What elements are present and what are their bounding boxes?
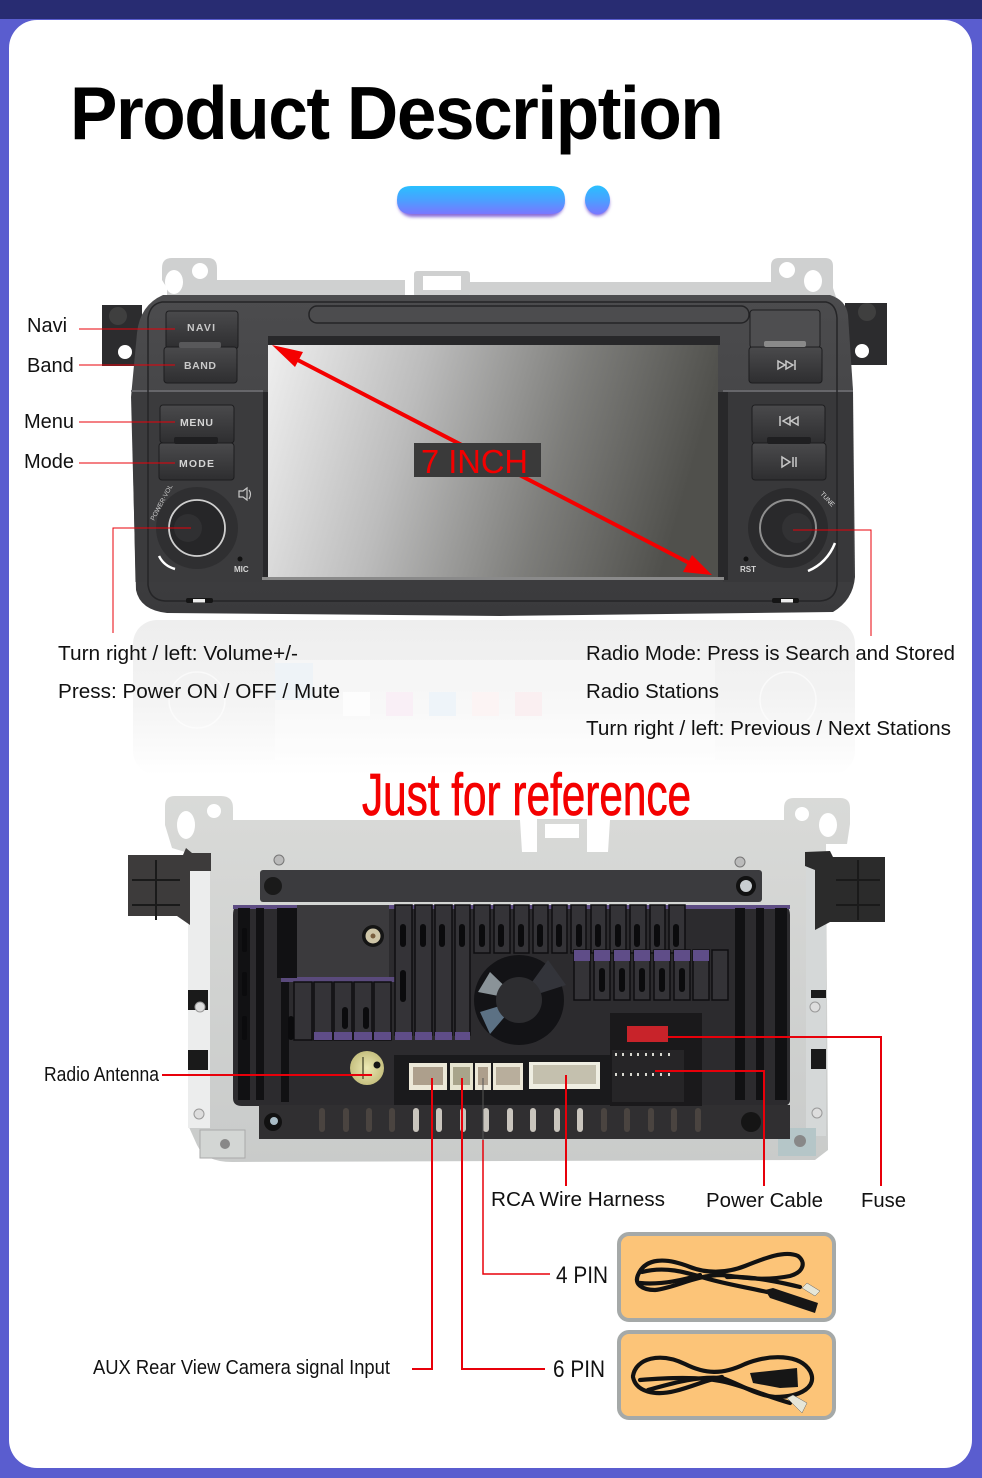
rear labels: AUX Rear View Camera signal Input	[93, 1357, 390, 1379]
left knob: POWER·VOL	[150, 483, 175, 522]
4 pin label: 4 PIN	[556, 1262, 608, 1289]
right knob: RST	[740, 565, 756, 574]
left knob: MIC	[234, 565, 249, 574]
cooling fins	[294, 905, 728, 1040]
side black ribs	[238, 908, 787, 1102]
rear labels: Radio Antenna	[44, 1064, 160, 1086]
fuse and power socket	[610, 1013, 702, 1106]
rear labels: Power Cable	[706, 1190, 823, 1212]
rear callout lines	[162, 1037, 881, 1369]
6 pin label: 6 PIN	[553, 1356, 605, 1383]
screws	[274, 855, 284, 865]
mounting brackets	[162, 258, 836, 297]
buttons right	[749, 310, 826, 480]
front labels: Menu	[24, 411, 74, 433]
side brackets	[128, 848, 211, 925]
6 pin cable photo	[619, 1332, 834, 1418]
lower vented strip	[259, 1105, 790, 1139]
rear labels: Fuse	[861, 1190, 906, 1212]
front head unit	[102, 258, 887, 616]
rear head unit	[128, 796, 885, 1162]
purple fin highlights	[314, 950, 709, 1040]
main housing	[233, 905, 790, 1106]
volume knob description	[58, 643, 340, 703]
upper black strip	[260, 870, 762, 902]
screen	[268, 345, 718, 578]
vent slots	[242, 924, 685, 1040]
left knob	[150, 483, 250, 574]
buttons left: MODE	[179, 458, 214, 470]
front labels	[24, 315, 74, 473]
tune knob description: Radio Stations	[586, 681, 719, 703]
volume knob description: Turn right / left: Volume+/-	[58, 643, 298, 665]
buttons left: NAVI	[187, 322, 215, 334]
volume knob description: Press: Power ON / OFF / Mute	[58, 681, 340, 703]
right knob	[740, 488, 836, 574]
block around SMA connector	[297, 905, 389, 977]
latches	[186, 598, 799, 603]
corner tabs	[200, 1130, 245, 1158]
7 inch diagonal arrow	[272, 345, 712, 575]
metal plate	[165, 796, 850, 1162]
reference note: Just for reference	[362, 762, 691, 828]
front labels: Band	[27, 355, 74, 377]
rear labels: RCA Wire Harness	[491, 1189, 665, 1211]
decorative pill and dot	[397, 186, 610, 217]
screen size label: 7 INCH	[421, 443, 528, 480]
side ears	[102, 305, 142, 366]
buttons left: BAND	[184, 360, 216, 372]
disc slot	[309, 306, 749, 323]
buttons left: MENU	[180, 417, 213, 429]
front callout lines	[79, 329, 871, 636]
tune knob description: Turn right / left: Previous / Next Stations	[586, 718, 951, 740]
4 pin cable photo	[619, 1234, 834, 1320]
SMA antenna connector	[362, 925, 384, 947]
harness connectors	[409, 1062, 600, 1090]
title: Product Description	[70, 72, 722, 155]
tune knob description: Radio Mode: Press is Search and Stored	[586, 643, 955, 665]
connector bay	[394, 1055, 610, 1105]
buttons left	[159, 311, 238, 480]
tune knob description	[586, 643, 955, 740]
front labels: Mode	[24, 451, 74, 473]
rear labels	[44, 1064, 906, 1379]
right knob: TUNE	[819, 491, 836, 509]
front labels: Navi	[27, 315, 67, 337]
chassis	[131, 295, 855, 616]
radio antenna socket	[350, 1051, 384, 1085]
fan	[474, 955, 566, 1045]
front panel reflection	[133, 620, 855, 775]
screen bezel	[263, 336, 728, 580]
